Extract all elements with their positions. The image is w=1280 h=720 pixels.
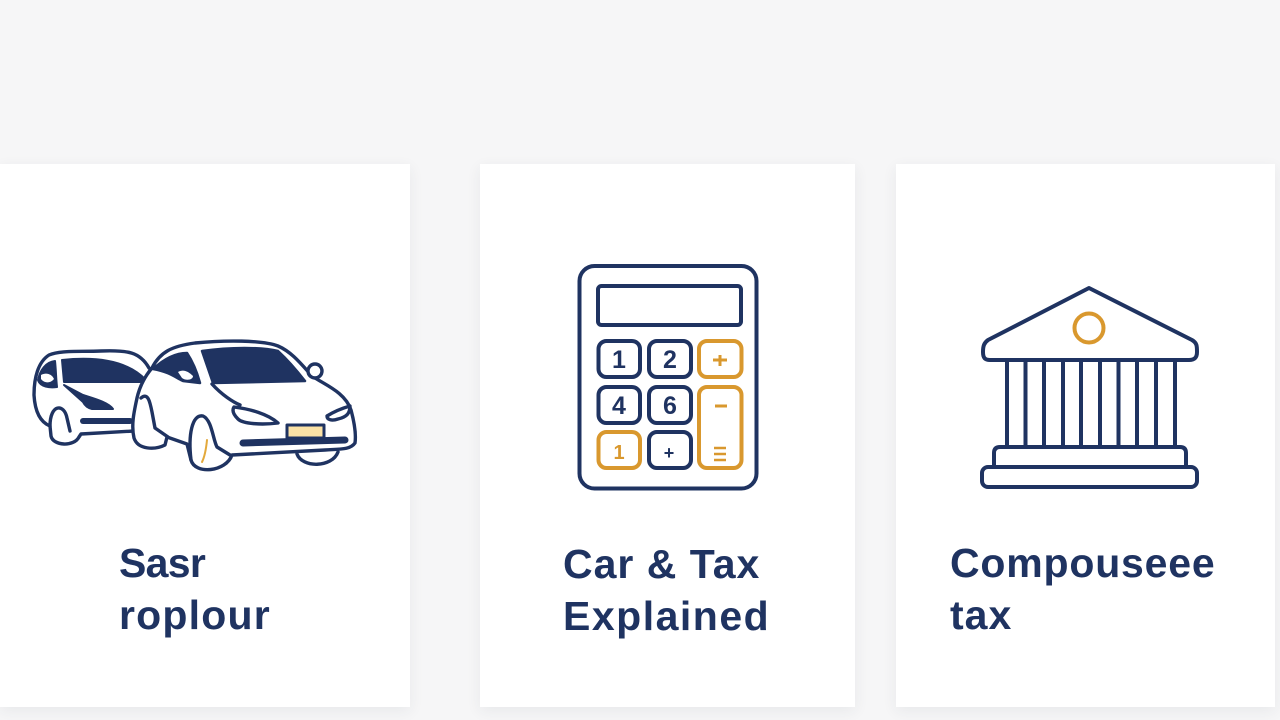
panel: bank card: [896, 164, 1275, 707]
grille and plate: [243, 440, 345, 443]
calculator digits: [612, 346, 677, 464]
calculator digits: 4: [612, 392, 626, 420]
panel: calculator card: [480, 164, 855, 707]
calculator digits: 6: [663, 392, 677, 420]
rear car windows: [62, 359, 146, 382]
front car body: [133, 341, 355, 470]
calculator digits: 1: [613, 442, 625, 464]
heading: bank card: [950, 540, 1215, 638]
heading: bank card: tax: [950, 592, 1012, 638]
hood line and headlights: [212, 384, 240, 405]
heading: calculator card: [563, 541, 770, 639]
front car windows: [202, 348, 305, 383]
mirror: [308, 364, 322, 378]
heading: car card: [119, 540, 271, 638]
heading: car card: Sasr: [119, 540, 205, 586]
heading: calculator card: Explained: [563, 593, 770, 639]
panel: car card: [0, 164, 410, 707]
calculator digits: 2: [663, 346, 677, 374]
heading: calculator card: Car & Tax: [563, 541, 760, 587]
calculator digits: +: [664, 443, 674, 463]
rear car body: [34, 351, 149, 444]
heading: bank card: Compouseee: [950, 540, 1215, 586]
heading: car card: roplour: [119, 592, 271, 638]
calculator digits: 1: [612, 346, 626, 374]
